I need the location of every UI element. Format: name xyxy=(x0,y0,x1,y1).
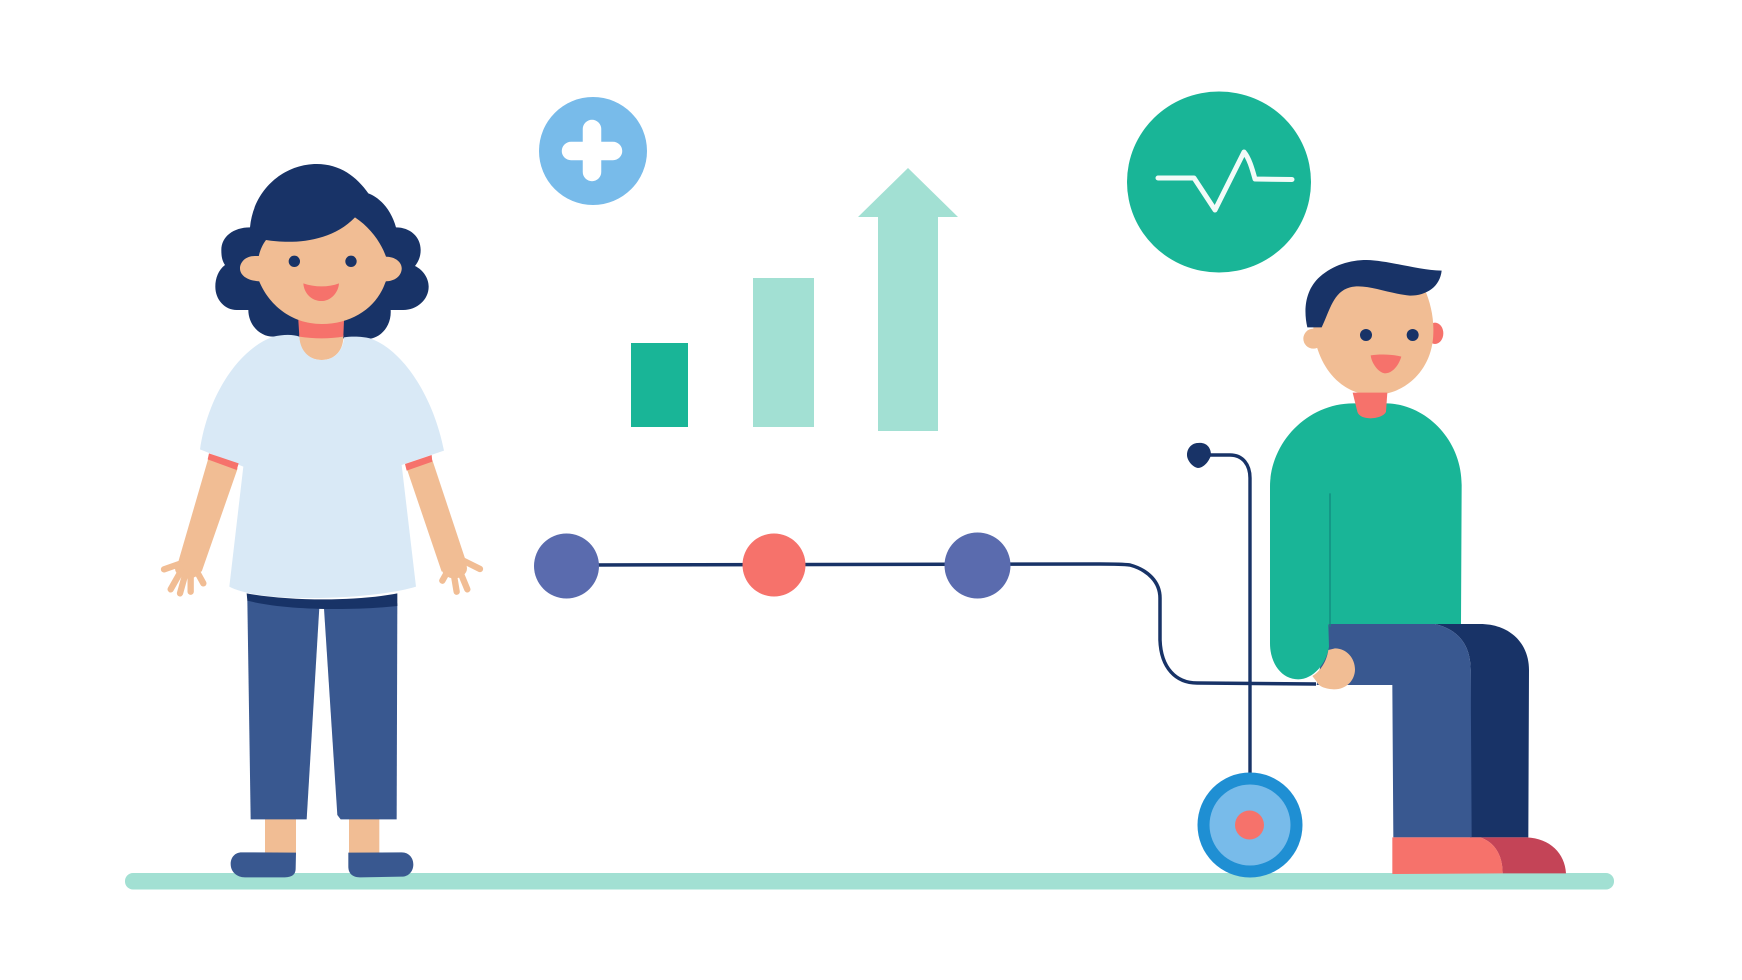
stethoscope chest piece xyxy=(1198,772,1302,878)
woman right arm xyxy=(407,460,465,572)
man neck xyxy=(1353,393,1387,418)
man face xyxy=(1313,285,1433,395)
woman waistband xyxy=(247,593,397,609)
man trousers front leg xyxy=(1317,624,1472,837)
short bar xyxy=(631,343,688,427)
man body xyxy=(1270,393,1566,874)
woman ears xyxy=(240,256,402,281)
icon: medical plus badge xyxy=(539,97,647,205)
stethoscope tube xyxy=(1205,455,1250,775)
progress line connecting to stethoscope xyxy=(590,564,1316,684)
woman trousers xyxy=(247,600,397,819)
man mouth xyxy=(1371,355,1401,373)
woman neck xyxy=(299,335,343,360)
man head xyxy=(1303,260,1443,395)
rising bar chart with arrow xyxy=(631,168,958,431)
woman shoes xyxy=(231,852,413,877)
man hair xyxy=(1305,260,1442,327)
man front shoe xyxy=(1392,837,1503,874)
stethoscope xyxy=(1187,443,1302,878)
woman left hand xyxy=(164,558,203,593)
man back shoe xyxy=(1480,837,1566,873)
woman figure xyxy=(164,164,480,877)
woman face xyxy=(257,217,388,324)
man sweater xyxy=(1270,403,1462,679)
woman eyes xyxy=(289,256,357,267)
seated man figure xyxy=(1270,260,1566,874)
man sleeve crease xyxy=(1328,493,1332,627)
man trousers back leg xyxy=(1435,624,1529,837)
woman upper body xyxy=(164,164,480,598)
woman shirt xyxy=(200,335,444,598)
woman hair xyxy=(215,164,429,339)
woman neckband xyxy=(298,320,344,338)
timeline dots xyxy=(534,532,1010,598)
man ears xyxy=(1303,323,1443,349)
woman sleeve cuffs xyxy=(208,453,432,471)
woman ankles xyxy=(265,817,379,855)
medium bar xyxy=(753,278,814,427)
up arrow xyxy=(858,168,958,431)
woman right hand xyxy=(442,558,480,592)
woman mouth xyxy=(303,283,339,301)
man eyes xyxy=(1360,329,1419,341)
woman lower body xyxy=(231,593,413,877)
ground line xyxy=(125,873,1614,890)
man hand xyxy=(1312,648,1355,689)
icon: heartbeat badge xyxy=(1127,92,1311,272)
woman left arm xyxy=(178,458,238,572)
stethoscope earpiece xyxy=(1187,443,1211,468)
